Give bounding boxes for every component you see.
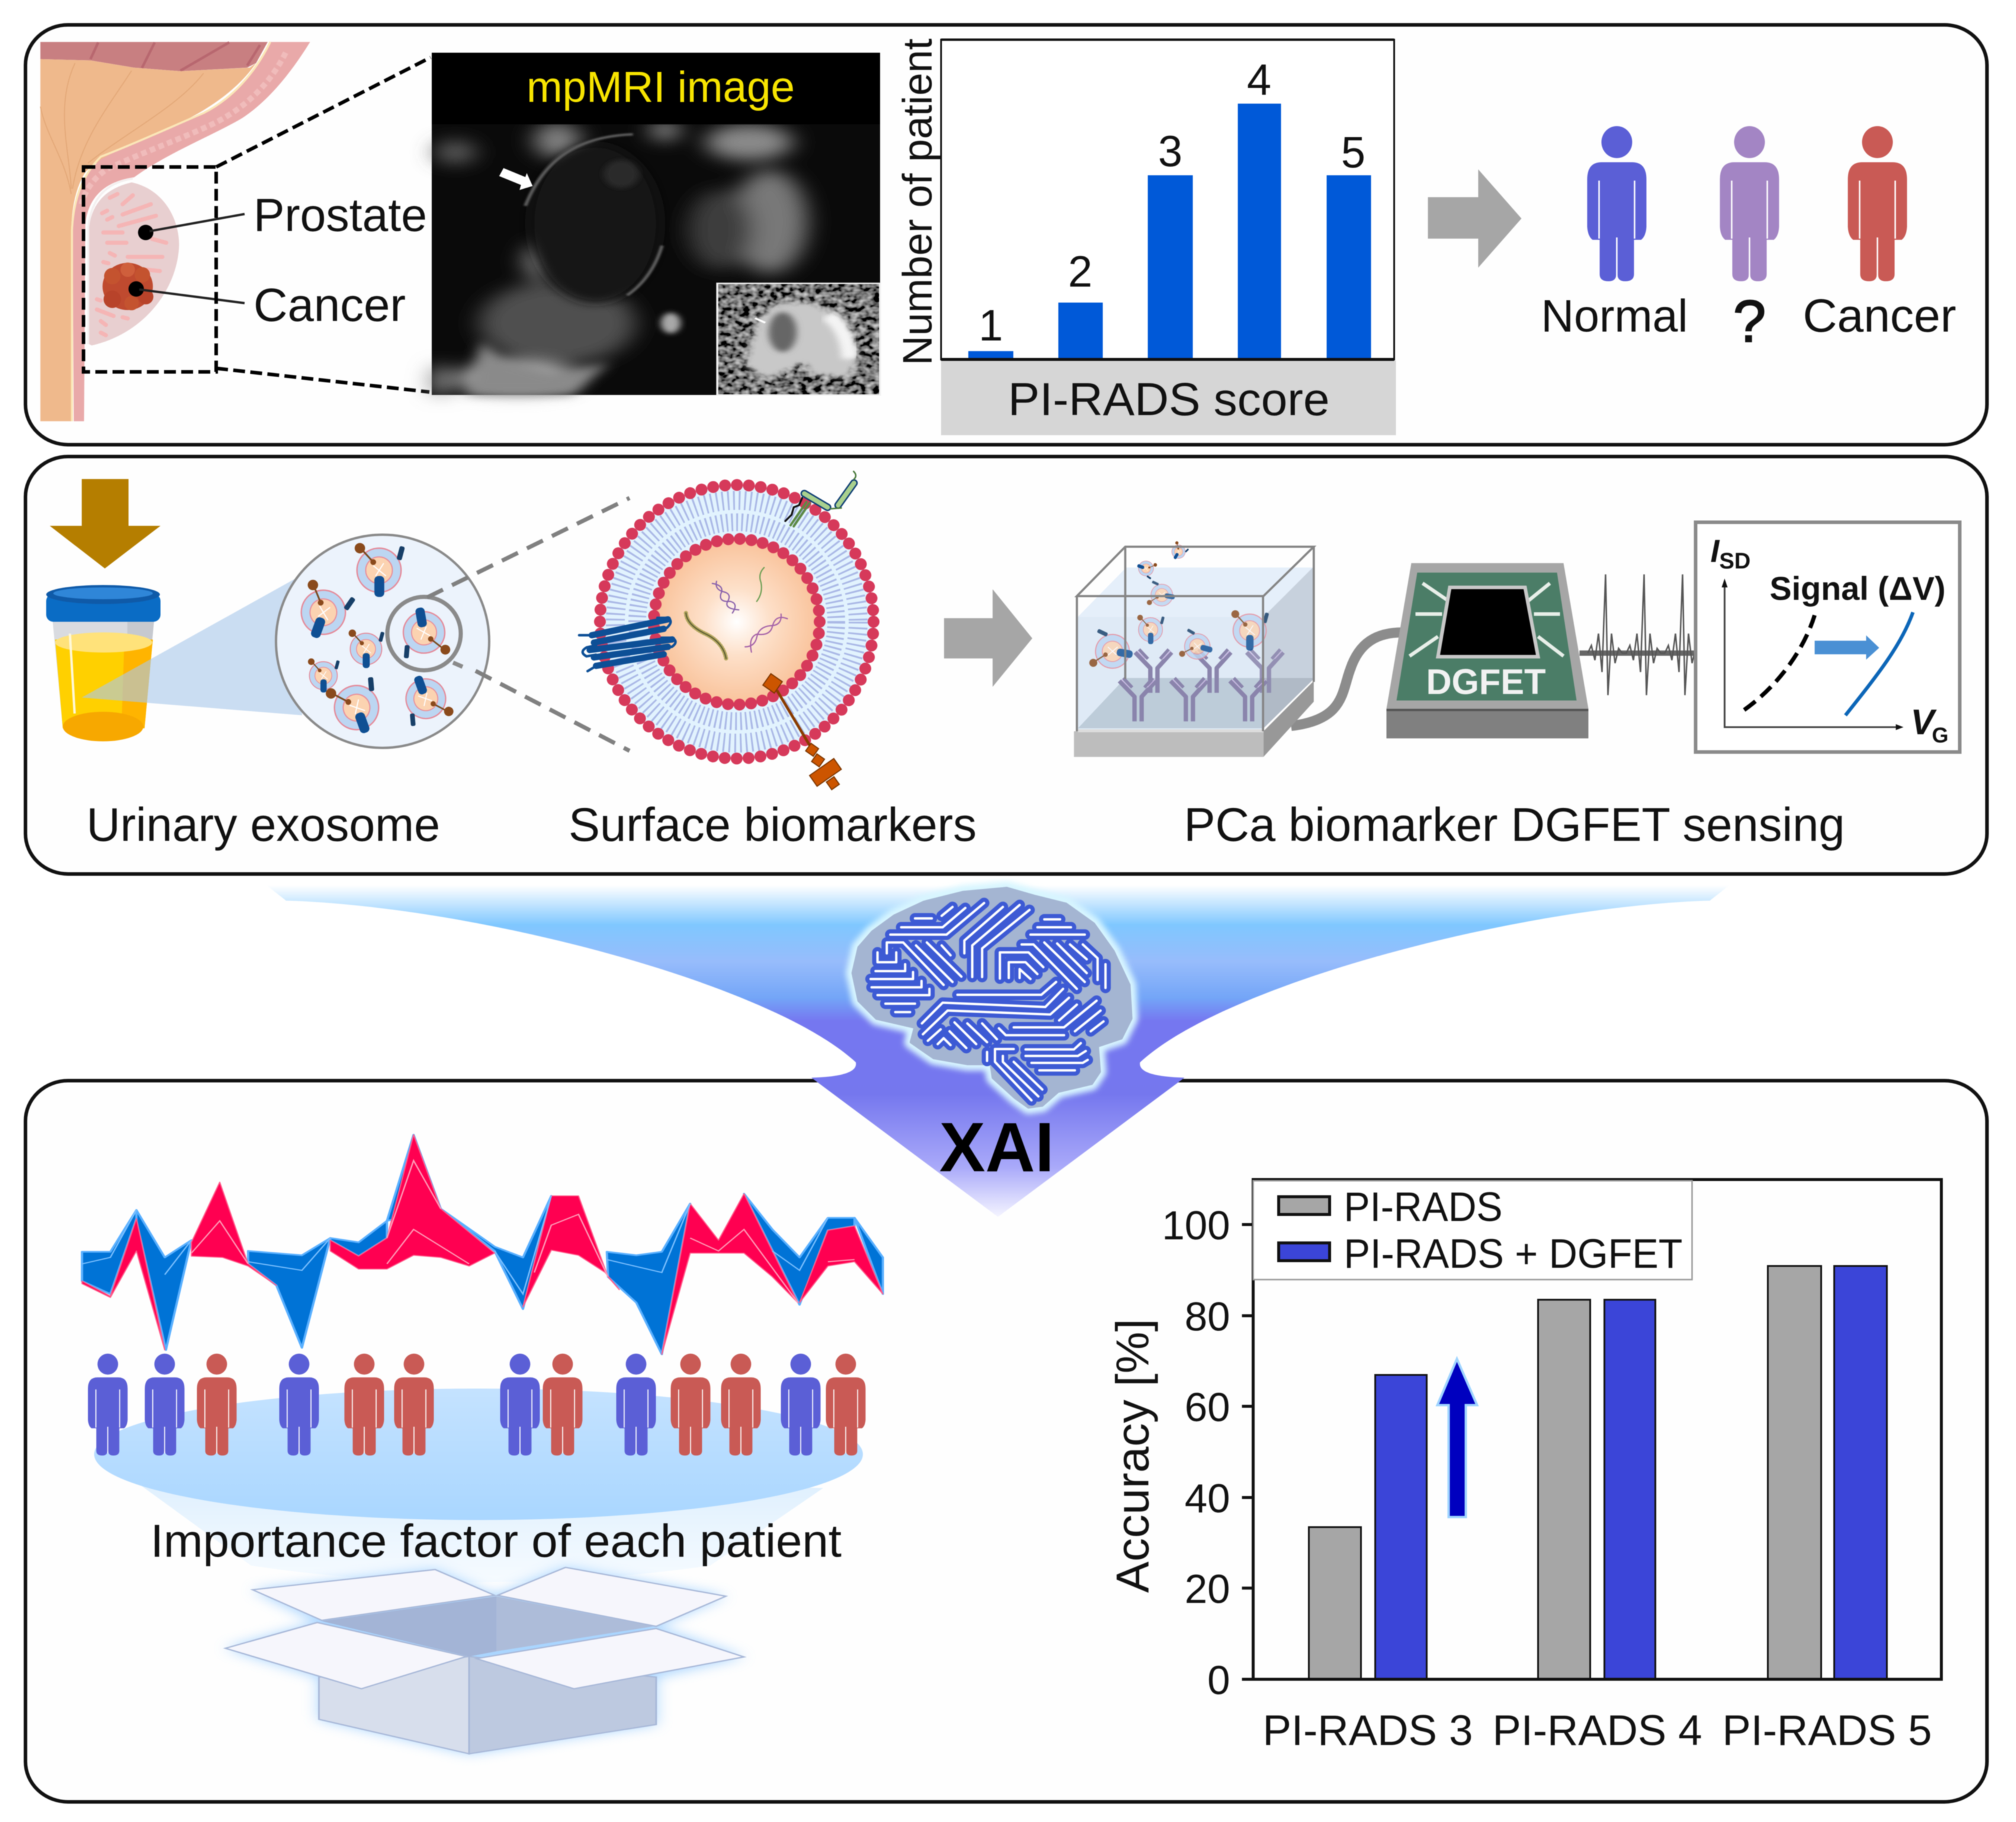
zoom beam [82, 579, 302, 715]
dashed zoom box [84, 57, 431, 392]
bar chart: patients per PI-RADS score [894, 38, 1396, 435]
transfer curve plot: SD [1719, 549, 1751, 574]
legend: PI-RADS [1344, 1184, 1503, 1230]
MRI title: mpMRI image [527, 63, 795, 111]
bar chart: accuracy: PI-RADS 5 [1722, 1707, 1932, 1754]
patient outcomes [1541, 126, 1956, 355]
DGFET device: DGFET [1426, 662, 1546, 702]
disk and cone [94, 1389, 863, 1582]
y tick labels [1162, 1203, 1230, 1703]
y tick labels: 100 [1162, 1203, 1230, 1248]
importance stream plot [82, 1135, 883, 1354]
bar chart: patients per PI-RADS score: 1 [978, 301, 1003, 350]
x labels: PI-RADS 3 [1263, 1707, 1473, 1754]
transfer curve plot [1696, 522, 1960, 752]
panel: urinary exosome DGFET sensing [25, 457, 1987, 874]
patient outcomes: Cancer [1803, 289, 1956, 342]
label: Urinary exosome: Urinary exosome [86, 798, 440, 851]
inset image [717, 284, 880, 395]
back-row antibodies [1135, 650, 1283, 693]
bar chart: patients per PI-RADS score: Number of patient [894, 38, 940, 365]
prostate anatomy illustration [40, 42, 310, 421]
blue membrane protein [579, 618, 676, 671]
cancer tumor [102, 262, 153, 310]
bar chart: patients per PI-RADS score: PI-RADS score [1008, 373, 1330, 425]
patient row [88, 1354, 866, 1455]
large exosome [579, 471, 874, 790]
XAI title: XAI [939, 1108, 1054, 1187]
bar chart: patients per PI-RADS score: 5 [1341, 128, 1366, 177]
exosome population circle [276, 535, 489, 748]
brown transmembrane protein [763, 674, 842, 790]
DGFET device [1386, 563, 1588, 738]
up arrow [1437, 1359, 1477, 1517]
y axis title: Accuracy [%] [1106, 1319, 1158, 1593]
label: Cancer: Cancer [253, 278, 406, 331]
patient outcomes: Normal [1541, 291, 1688, 342]
transfer curve plot: G [1932, 723, 1948, 747]
panel section: importance per patient [82, 1135, 883, 1754]
y tick labels: 40 [1184, 1476, 1230, 1521]
bar chart: patients per PI-RADS score: 3 [1158, 127, 1183, 176]
bar chart: accuracy [1106, 1180, 1941, 1754]
sensing tank [1074, 541, 1314, 757]
open box [226, 1567, 744, 1754]
urine cup [46, 585, 160, 741]
funnel [267, 885, 1729, 1217]
brain icon [853, 888, 1131, 1107]
y tick labels: 20 [1184, 1566, 1230, 1612]
bars [1309, 1266, 1887, 1679]
label: Prostate: Prostate [253, 188, 427, 241]
bar chart: patients per PI-RADS score: 4 [1247, 55, 1272, 104]
front-row antibodies [1119, 678, 1266, 721]
y tick labels: 0 [1208, 1657, 1230, 1703]
dashed zoom lines [427, 498, 630, 751]
arrow: exosome to sensing [944, 589, 1032, 687]
transfer curve plot: Signal (ΔV) [1770, 570, 1946, 607]
bound exosomes [1089, 580, 1269, 673]
label: Surface biomarkers: Surface biomarkers [569, 798, 977, 851]
legend: PI-RADS + DGFET [1344, 1230, 1683, 1277]
magnifier [453, 663, 463, 667]
title bar [432, 53, 880, 124]
prostate gland [89, 182, 179, 345]
y tick labels: 60 [1184, 1384, 1230, 1430]
circuit traces [871, 903, 1106, 1100]
y tick labels: 80 [1184, 1294, 1230, 1339]
signal waveform [1580, 574, 1699, 695]
antibody on membrane [785, 471, 856, 526]
transfer curve plot: I [1710, 534, 1720, 569]
panel: mpMRI diagnosis [25, 25, 1987, 445]
label: PCa biomarker DGFET sensing: PCa biomarker DGFET sensing [1184, 798, 1845, 851]
white pointer arrow [499, 168, 532, 190]
label: importance factor: Importance factor of each patient [150, 1515, 842, 1567]
patient outcomes: ? [1733, 288, 1766, 355]
mpMRI image [431, 53, 880, 397]
transfer curve plot: V [1911, 702, 1937, 742]
legend [1253, 1181, 1692, 1280]
panel: explainable AI results outline [25, 1081, 1987, 1802]
bar chart: accuracy: PI-RADS 4 [1492, 1707, 1702, 1754]
down arrow [50, 479, 160, 568]
arrow: chart to patients [1428, 169, 1521, 268]
RNA and DNA strands [686, 567, 787, 658]
bar chart: patients per PI-RADS score: 2 [1068, 247, 1093, 296]
cable [1291, 632, 1402, 726]
